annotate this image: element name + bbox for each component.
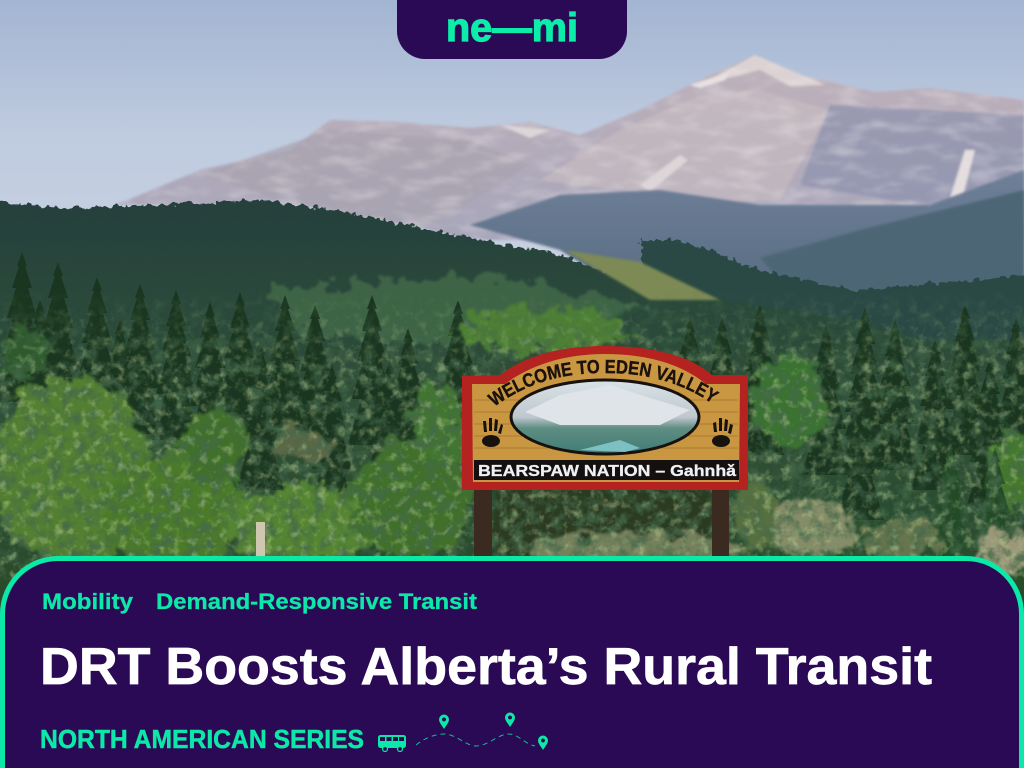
icon: map pin 1 bbox=[439, 714, 449, 729]
wood board bbox=[472, 354, 740, 482]
forested ridge left bbox=[0, 198, 1024, 620]
lower conifers bbox=[926, 445, 1019, 598]
category tag: Mobility: Mobility bbox=[42, 589, 134, 614]
headline: DRT Boosts Alberta’s Rural Transit bbox=[40, 638, 932, 696]
category tag: Demand-Responsive Transit: Demand-Responsive Transit bbox=[156, 589, 478, 614]
sky bbox=[0, 0, 1024, 300]
wood planks bbox=[474, 400, 738, 448]
deciduous trees bbox=[0, 308, 1024, 570]
distant forested ridge right bbox=[640, 240, 1024, 380]
paw icon right bbox=[712, 418, 733, 447]
paw icon left bbox=[482, 418, 503, 447]
black name band bbox=[474, 460, 739, 480]
sign heading bbox=[494, 373, 726, 414]
blue foothills bbox=[470, 170, 1024, 300]
foliage texture bbox=[0, 290, 1024, 580]
sign: Welcome to Eden Valley: WELCOME TO EDEN VALLEY bbox=[486, 360, 720, 406]
title panel bbox=[0, 556, 1024, 768]
sign posts bbox=[474, 488, 729, 558]
mountain range bbox=[100, 50, 1024, 240]
conifer trees bbox=[0, 252, 1024, 520]
sign: Welcome to Eden Valley bbox=[462, 346, 748, 556]
fence post bbox=[256, 522, 265, 558]
band text: BEARSPAW NATION – Gahnhǎ bbox=[478, 463, 736, 480]
route dashed line bbox=[416, 734, 535, 746]
sign frame bbox=[462, 346, 748, 490]
icon: bus bbox=[378, 735, 406, 752]
icon: map pin 2 bbox=[505, 712, 515, 727]
shrubs below sign bbox=[266, 427, 1024, 581]
oval mountain painting bbox=[511, 380, 699, 454]
grassy slope bbox=[565, 250, 720, 300]
ridge lighter band bbox=[260, 275, 650, 345]
logo wordmark: ne—mi bbox=[446, 6, 578, 50]
logo tab bbox=[397, 0, 627, 59]
series label: NORTH AMERICAN SERIES bbox=[40, 724, 364, 754]
icon: map pin 3 bbox=[538, 736, 548, 750]
